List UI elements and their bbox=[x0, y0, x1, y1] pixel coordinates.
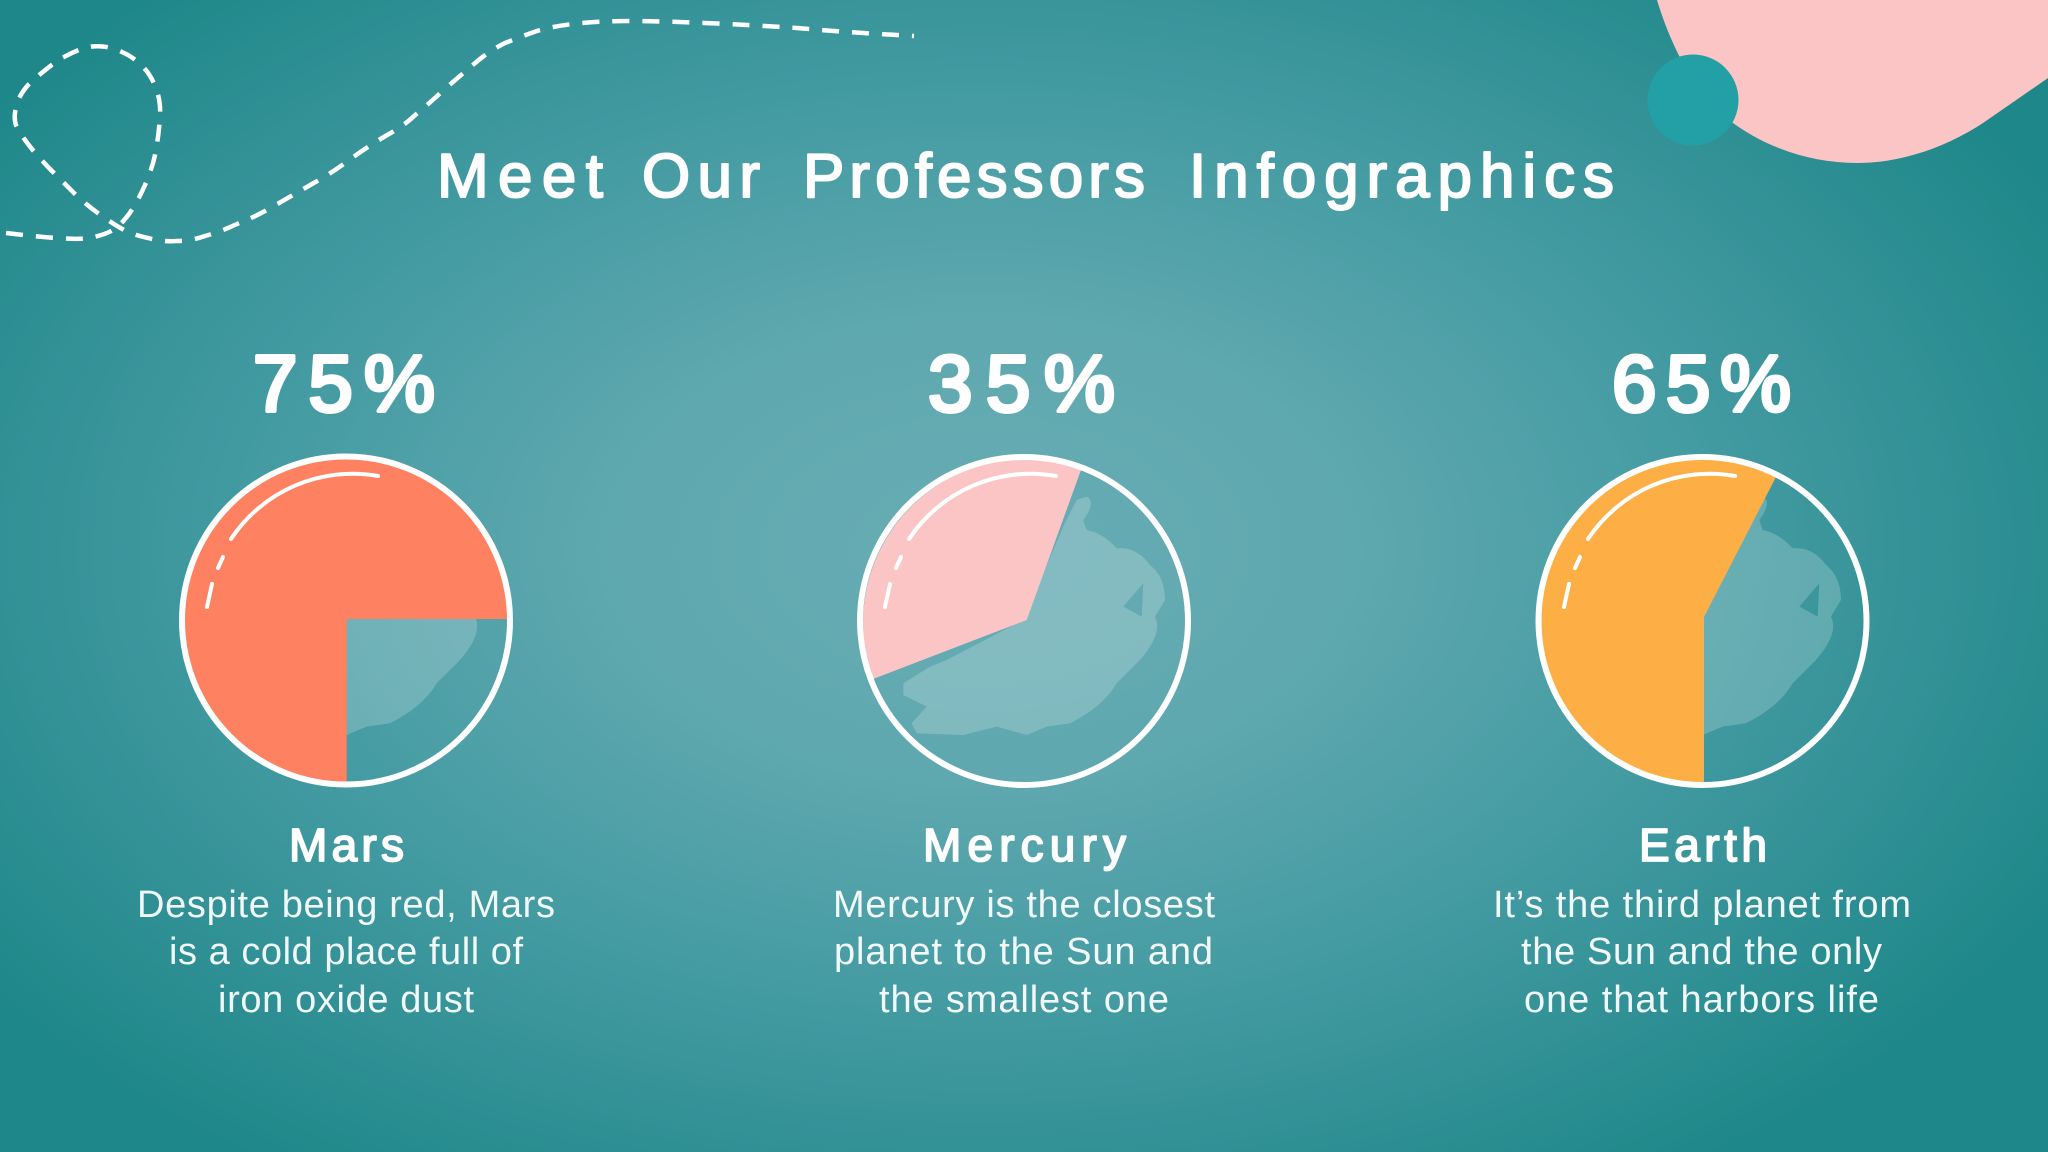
panel: Mars bbox=[137, 339, 555, 1021]
pie slice: Mercury bbox=[863, 459, 1082, 679]
pink corner blob bbox=[1657, 0, 2048, 163]
chalk scribble: Earth bbox=[1579, 497, 1841, 735]
percentage: 35%: 35% bbox=[928, 339, 1115, 428]
outline ring: Mercury bbox=[860, 457, 1188, 785]
highlight: Mercury bbox=[885, 474, 1056, 607]
title: Professors bbox=[803, 142, 1145, 211]
panel: Mercury bbox=[833, 339, 1215, 1021]
pie slice: Mars bbox=[182, 457, 510, 785]
highlight: Earth bbox=[1564, 474, 1735, 607]
description: Mercury: the smallest one bbox=[879, 979, 1169, 1021]
decorative dashed loop line bbox=[6, 21, 914, 241]
outline ring: Mars bbox=[182, 456, 510, 784]
teal corner circle bbox=[1648, 54, 1738, 146]
title: Our bbox=[642, 142, 760, 211]
label: Mars: Mars bbox=[289, 819, 404, 871]
title bbox=[437, 142, 1614, 211]
percentage: 65%: 65% bbox=[1612, 339, 1791, 428]
highlight: Mars bbox=[207, 474, 378, 607]
description: Mars bbox=[137, 884, 555, 1021]
panel: Earth bbox=[1493, 339, 1911, 1021]
description: Mercury: Mercury is the closest bbox=[833, 884, 1215, 926]
label: Earth: Earth bbox=[1639, 819, 1767, 871]
percentage: 75%: 75% bbox=[253, 339, 435, 428]
description: Earth: It’s the third planet from bbox=[1493, 884, 1911, 926]
description: Mercury: planet to the Sun and bbox=[834, 931, 1213, 973]
description: Mercury bbox=[833, 884, 1215, 1021]
pie slice: Earth bbox=[1538, 457, 1777, 785]
title: Infographics bbox=[1189, 142, 1614, 211]
description: Earth bbox=[1493, 884, 1911, 1021]
chalk scribble: Mars bbox=[223, 497, 485, 735]
description: Earth: the Sun and the only bbox=[1521, 931, 1882, 973]
description: Mars: iron oxide dust bbox=[218, 979, 474, 1021]
description: Mars: Despite being red, Mars bbox=[137, 884, 555, 926]
chalk scribble: Mercury bbox=[903, 497, 1165, 735]
outline ring: Earth bbox=[1538, 457, 1866, 785]
title: Meet bbox=[437, 142, 603, 211]
description: Mars: is a cold place full of bbox=[169, 931, 523, 973]
label: Mercury: Mercury bbox=[923, 819, 1126, 871]
description: Earth: one that harbors life bbox=[1524, 979, 1879, 1021]
